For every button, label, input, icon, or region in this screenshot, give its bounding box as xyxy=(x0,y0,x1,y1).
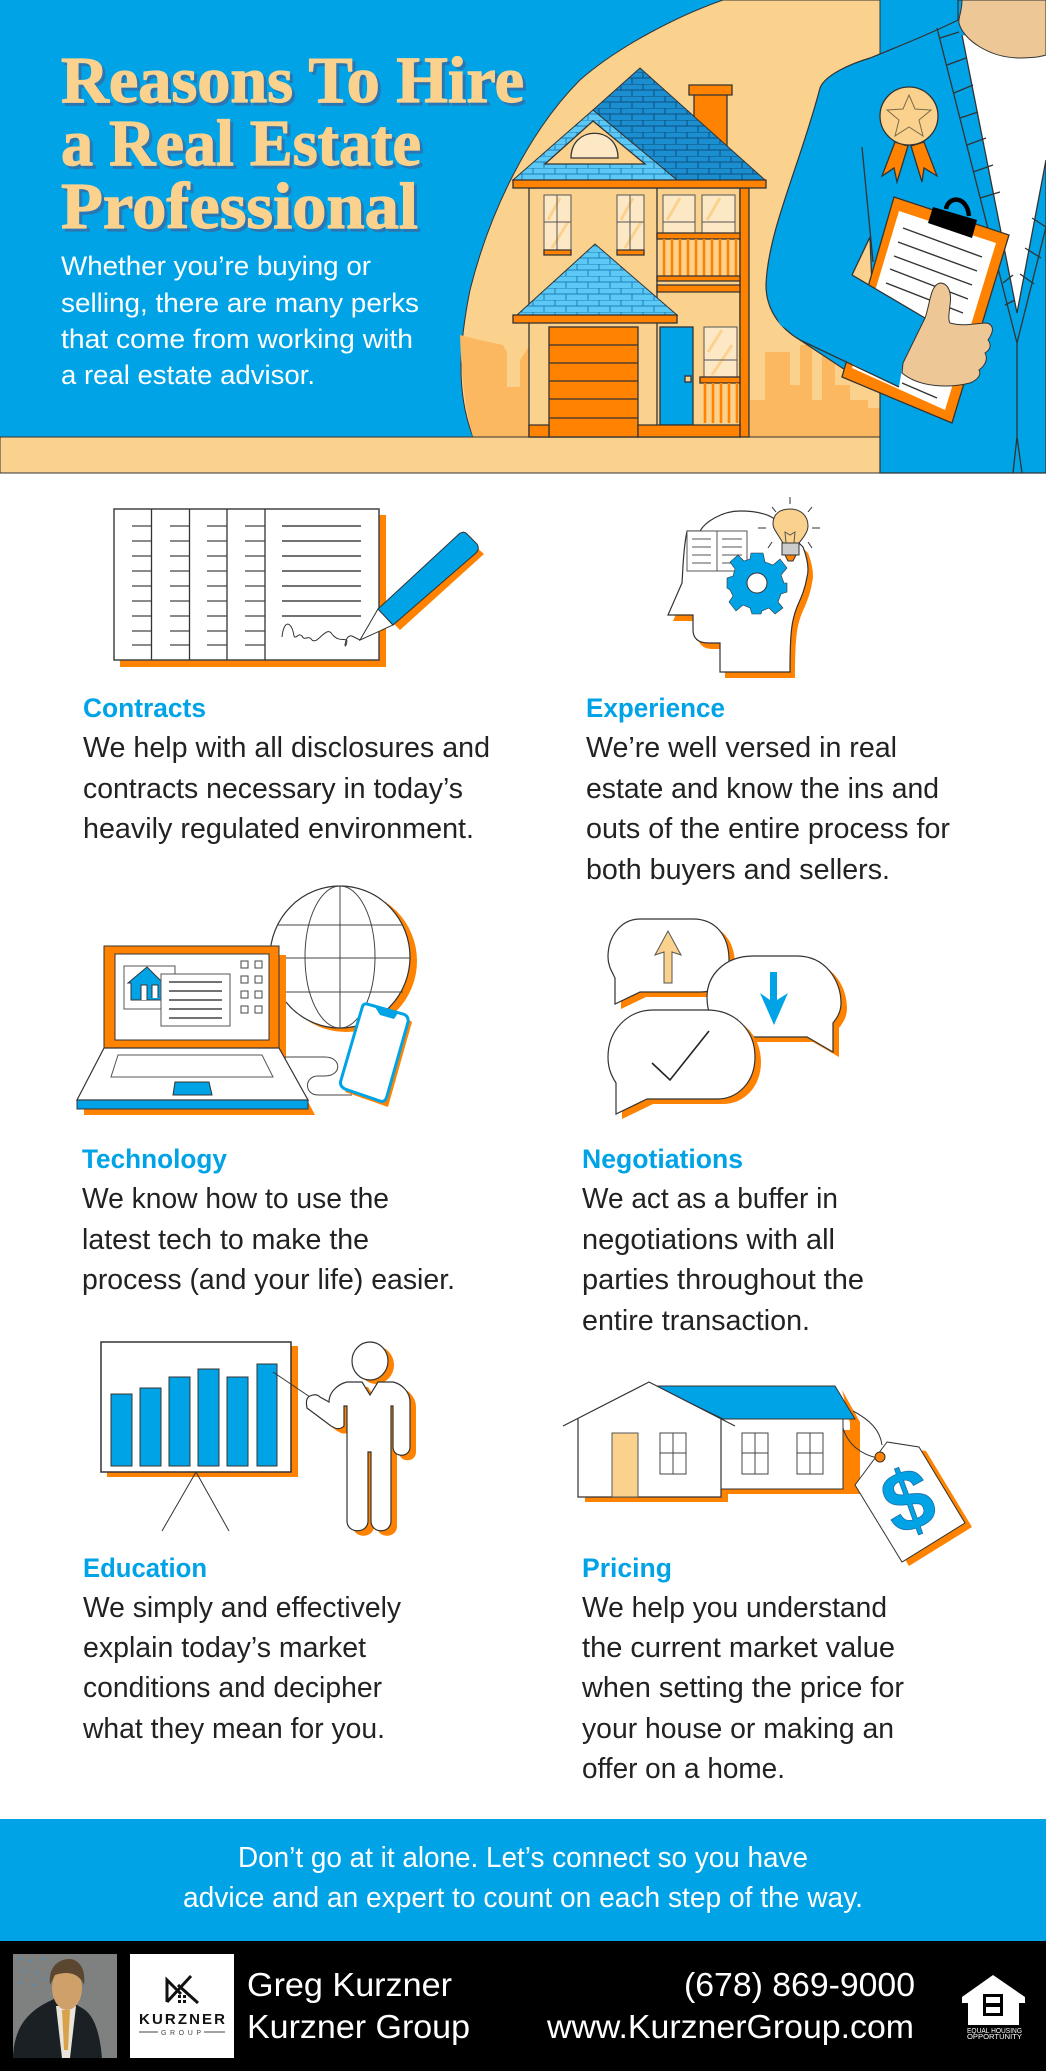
illustration: house xyxy=(513,68,766,437)
panel: negotiations xyxy=(582,919,864,1337)
title: a Real Estate xyxy=(61,107,421,180)
text: technology: process (and your life) easier. xyxy=(82,1264,455,1296)
text: pricing: your house or making an xyxy=(582,1713,894,1745)
photo: agent portrait xyxy=(13,1954,117,2058)
text: negotiations: entire transaction. xyxy=(582,1305,810,1337)
balcony xyxy=(657,233,740,292)
icon: presenter with bar chart xyxy=(101,1342,416,1536)
text: negotiations: We act as a buffer in xyxy=(582,1183,838,1215)
hero subtitle: Whether you’re buying or xyxy=(61,251,371,281)
footer xyxy=(0,1941,1046,2071)
text: contracts xyxy=(83,732,490,845)
window sills xyxy=(544,250,644,255)
text: experience: We’re well versed in real xyxy=(586,732,897,764)
hero background xyxy=(0,0,1046,473)
agent name xyxy=(247,1966,470,2045)
house body xyxy=(529,188,740,437)
heading: negotiations: Negotiations xyxy=(582,1144,743,1174)
icon: head with gear and bulb xyxy=(668,497,820,678)
peach backdrop shape xyxy=(461,0,880,437)
text: technology xyxy=(82,1183,455,1296)
panel: education xyxy=(82,1342,416,1745)
front door xyxy=(660,327,693,425)
title: Reasons To Hire xyxy=(64,47,527,120)
panel: technology xyxy=(77,886,455,1296)
text: education: conditions and decipher xyxy=(83,1672,382,1704)
city skyline xyxy=(460,335,880,437)
gable xyxy=(545,121,645,164)
lower roof xyxy=(517,244,677,315)
text: pricing xyxy=(581,1592,904,1785)
heading: experience: Experience xyxy=(586,693,725,723)
heading: contracts: Contracts xyxy=(83,693,206,723)
text: negotiations xyxy=(582,1183,864,1337)
title xyxy=(61,44,527,246)
text: experience: both buyers and sellers. xyxy=(586,854,890,886)
call to action band: advice and an expert to count on each step of the way. xyxy=(183,1882,863,1914)
chimney xyxy=(689,85,732,150)
heading: education: Education xyxy=(83,1553,207,1583)
text: pricing: We help you understand xyxy=(582,1592,887,1624)
illustration: agent xyxy=(766,0,1046,473)
icon: equal housing opportunity: OPPORTUNITY xyxy=(967,2034,1022,2041)
title: Professional xyxy=(61,170,418,243)
call to action band: Don’t go at it alone. Let’s connect so you have xyxy=(238,1842,808,1874)
text: contracts: We help with all disclosures and xyxy=(83,732,490,764)
lower eave xyxy=(513,315,677,323)
heading: technology: Technology xyxy=(82,1144,227,1174)
icon: equal housing opportunity: EQUAL HOUSING xyxy=(967,2028,1022,2035)
contact details xyxy=(546,1966,915,2045)
icon: equal housing opportunity xyxy=(962,1975,1025,2041)
title: Reasons To Hire xyxy=(61,44,524,117)
icon: speech bubbles xyxy=(608,919,847,1119)
door side window xyxy=(700,327,740,423)
text: pricing: when setting the price for xyxy=(581,1672,904,1704)
neck xyxy=(959,0,1046,58)
inner peach gap xyxy=(852,237,872,287)
logo: Kurzner Group xyxy=(130,1954,234,2058)
panel: contracts xyxy=(83,509,490,845)
panel: experience xyxy=(586,497,950,886)
agent name: Greg Kurzner xyxy=(247,1966,452,2003)
medal xyxy=(880,87,938,182)
icon: laptop, globe, phone xyxy=(77,886,417,1115)
eave upper xyxy=(513,180,766,188)
text: experience: outs of the entire process for xyxy=(586,813,950,845)
icon: house with price tag xyxy=(563,1382,972,1566)
base xyxy=(529,425,740,437)
contact details: www.KurznerGroup.com xyxy=(546,2008,914,2045)
call to action band xyxy=(0,1819,1046,1941)
main roof xyxy=(593,68,765,180)
text: negotiations: parties throughout the xyxy=(582,1264,864,1296)
icon: contract and pen xyxy=(114,509,484,667)
heading: pricing: Pricing xyxy=(582,1553,672,1583)
hero subtitle xyxy=(61,251,419,390)
hero subtitle: a real estate advisor. xyxy=(61,360,315,390)
jacket seam xyxy=(862,147,873,262)
hand xyxy=(902,283,992,386)
logo: Kurzner Group: KURZNER xyxy=(139,2011,225,2028)
arm xyxy=(770,240,925,387)
panel: pricing xyxy=(563,1382,972,1785)
text: education: We simply and effectively xyxy=(83,1592,401,1624)
text: technology: latest tech to make the xyxy=(82,1224,369,1256)
text: education xyxy=(82,1592,401,1745)
text: contracts: contracts necessary in today’s xyxy=(83,773,463,805)
text: experience: estate and know the ins and xyxy=(586,773,939,805)
front gable roof xyxy=(513,110,677,180)
title: a Real Estate xyxy=(64,110,424,183)
gable window xyxy=(571,133,618,158)
text: education: what they mean for you. xyxy=(82,1713,385,1745)
hero subtitle: selling, there are many perks xyxy=(61,288,419,318)
hero subtitle: that come from working with xyxy=(61,324,413,354)
text: experience xyxy=(586,732,950,886)
text: technology: We know how to use the xyxy=(82,1183,389,1215)
upper windows xyxy=(544,195,735,250)
jacket xyxy=(766,0,1046,473)
garage door xyxy=(549,327,638,437)
ground strip xyxy=(0,437,880,473)
text: contracts: heavily regulated environment. xyxy=(83,813,474,845)
text: education: explain today’s market xyxy=(83,1632,366,1664)
lapels xyxy=(937,28,1046,473)
text: negotiations: negotiations with all xyxy=(582,1224,835,1256)
contact details: (678) 869-9000 xyxy=(684,1966,915,2003)
agent name: Kurzner Group xyxy=(247,2008,470,2045)
icon: house with price tag: $ xyxy=(869,1448,947,1554)
shirt xyxy=(962,35,1046,313)
logo: Kurzner Group: GROUP xyxy=(161,2030,201,2037)
text: pricing: offer on a home. xyxy=(582,1753,785,1785)
corner column xyxy=(740,188,749,437)
title: Professional xyxy=(64,173,421,246)
text: pricing: the current market value xyxy=(582,1632,895,1664)
clipboard xyxy=(842,197,1009,423)
